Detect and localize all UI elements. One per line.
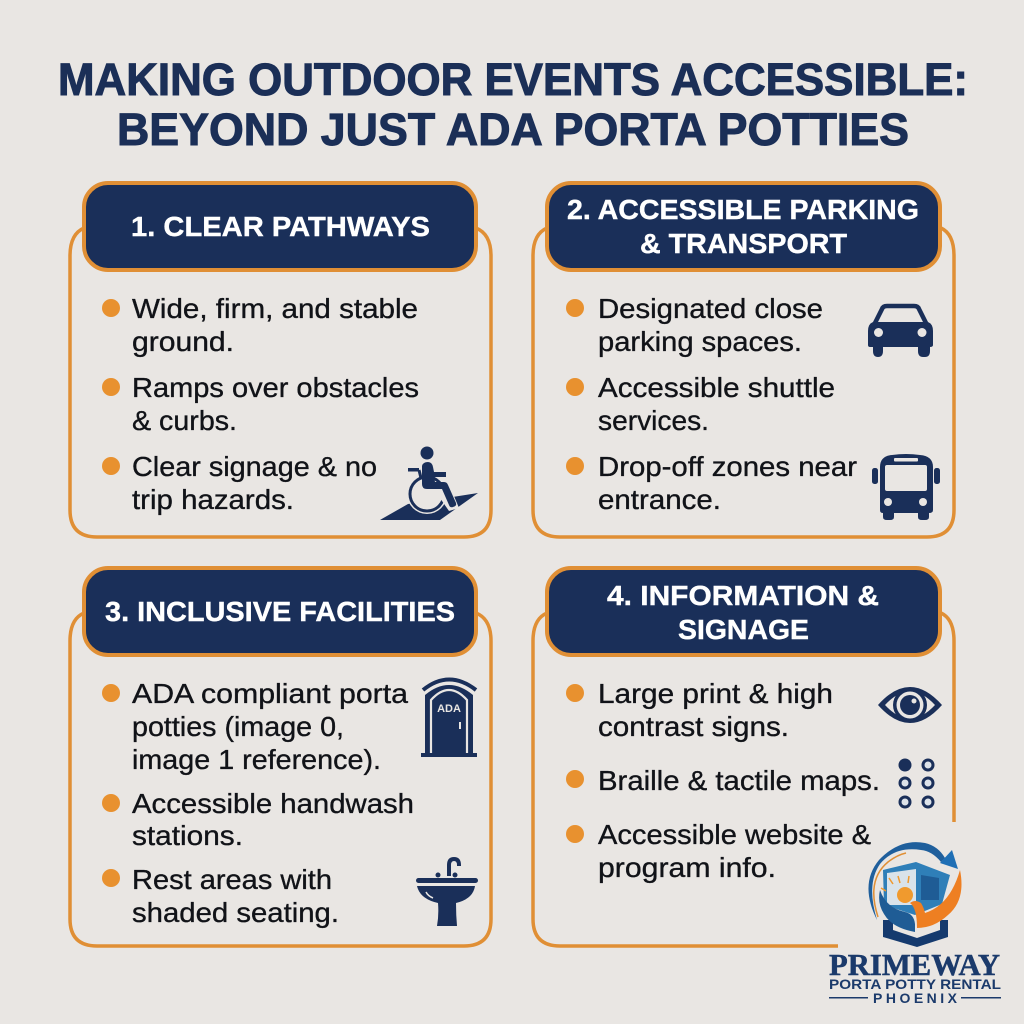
bullet list: information and signage <box>566 678 880 883</box>
bullet list: information and signage: contrast signs. <box>598 711 789 742</box>
bullet list: information and signage: program info. <box>598 852 776 883</box>
bullet list: parking and transport: services. <box>598 405 709 436</box>
bullet list: clear pathways: Ramps over obstacles <box>132 372 419 403</box>
bullet list: clear pathways: ground. <box>132 326 234 357</box>
panel: accessible parking and transport <box>533 183 954 537</box>
title <box>58 54 968 155</box>
icon: braille dots <box>898 758 933 807</box>
icon: wheelchair on ramp <box>380 446 478 520</box>
bullet list: information and signage: Accessible website & <box>598 819 871 850</box>
icon: ADA porta potty <box>421 680 477 757</box>
bullet list: information and signage: Large print & high <box>598 678 833 709</box>
bullet list: information and signage: Braille & tactile maps. <box>598 765 880 796</box>
bullet list: parking and transport: Drop-off zones near <box>598 451 857 482</box>
icon: sink <box>416 859 478 926</box>
bullet list: inclusive facilities: Accessible handwash <box>132 788 414 819</box>
bullet list: inclusive facilities: image 1 reference). <box>132 744 381 775</box>
logo wordmark: PHOENIX <box>873 990 958 1006</box>
icon: bus <box>872 454 940 520</box>
bullet list: parking and transport: Accessible shuttle <box>598 372 835 403</box>
heading: accessible parking and transport: & TRANSPORT <box>640 228 847 259</box>
panel: information and signage <box>533 568 954 946</box>
bullet list: inclusive facilities <box>102 678 414 928</box>
bullet list: inclusive facilities: potties (image 0, <box>132 711 344 742</box>
heading: accessible parking and transport: 2. ACCESSIBLE PARKING <box>567 194 919 225</box>
heading: accessible parking and transport <box>547 183 940 270</box>
bullet list: clear pathways <box>102 293 419 515</box>
icon: car <box>868 306 933 357</box>
bullet list: parking and transport: parking spaces. <box>598 326 802 357</box>
heading: inclusive facilities <box>84 568 476 655</box>
heading: clear pathways: 1. CLEAR PATHWAYS <box>131 211 430 242</box>
icon: eye <box>878 687 942 723</box>
heading: clear pathways <box>84 183 476 270</box>
bullet list: parking and transport <box>566 293 857 515</box>
bullet list: inclusive facilities: Rest areas with <box>132 864 332 895</box>
title: MAKING OUTDOOR EVENTS ACCESSIBLE: <box>58 54 968 105</box>
bullet list: clear pathways: Clear signage & no <box>132 451 377 482</box>
heading: information and signage: 4. INFORMATION & <box>607 580 879 611</box>
bullet list: inclusive facilities: shaded seating. <box>132 897 339 928</box>
logo wordmark: PRIMEWAY <box>829 947 1000 982</box>
icon: ADA porta potty: ADA <box>437 703 461 715</box>
heading: inclusive facilities: 3. INCLUSIVE FACILITIES <box>105 596 455 627</box>
bullet list: parking and transport: Designated close <box>598 293 823 324</box>
title: BEYOND JUST ADA PORTA POTTIES <box>117 104 909 155</box>
bullet list: clear pathways: Wide, firm, and stable <box>132 293 418 324</box>
logo: Primeway Porta Potty Rental Phoenix <box>829 842 1001 1006</box>
heading: information and signage: SIGNAGE <box>678 614 809 645</box>
bullet list: clear pathways: & curbs. <box>132 405 237 436</box>
bullet list: parking and transport: entrance. <box>598 484 721 515</box>
panel: inclusive facilities <box>70 568 491 946</box>
bullet list: clear pathways: trip hazards. <box>132 484 294 515</box>
bullet list: inclusive facilities: stations. <box>132 820 243 851</box>
logo emblem <box>868 842 962 947</box>
panel: clear pathways <box>70 183 491 537</box>
heading: information and signage <box>547 568 940 655</box>
logo wordmark <box>829 947 1001 1006</box>
bullet list: inclusive facilities: ADA compliant porta <box>132 678 408 709</box>
logo wordmark: PORTA POTTY RENTAL <box>829 976 1001 992</box>
